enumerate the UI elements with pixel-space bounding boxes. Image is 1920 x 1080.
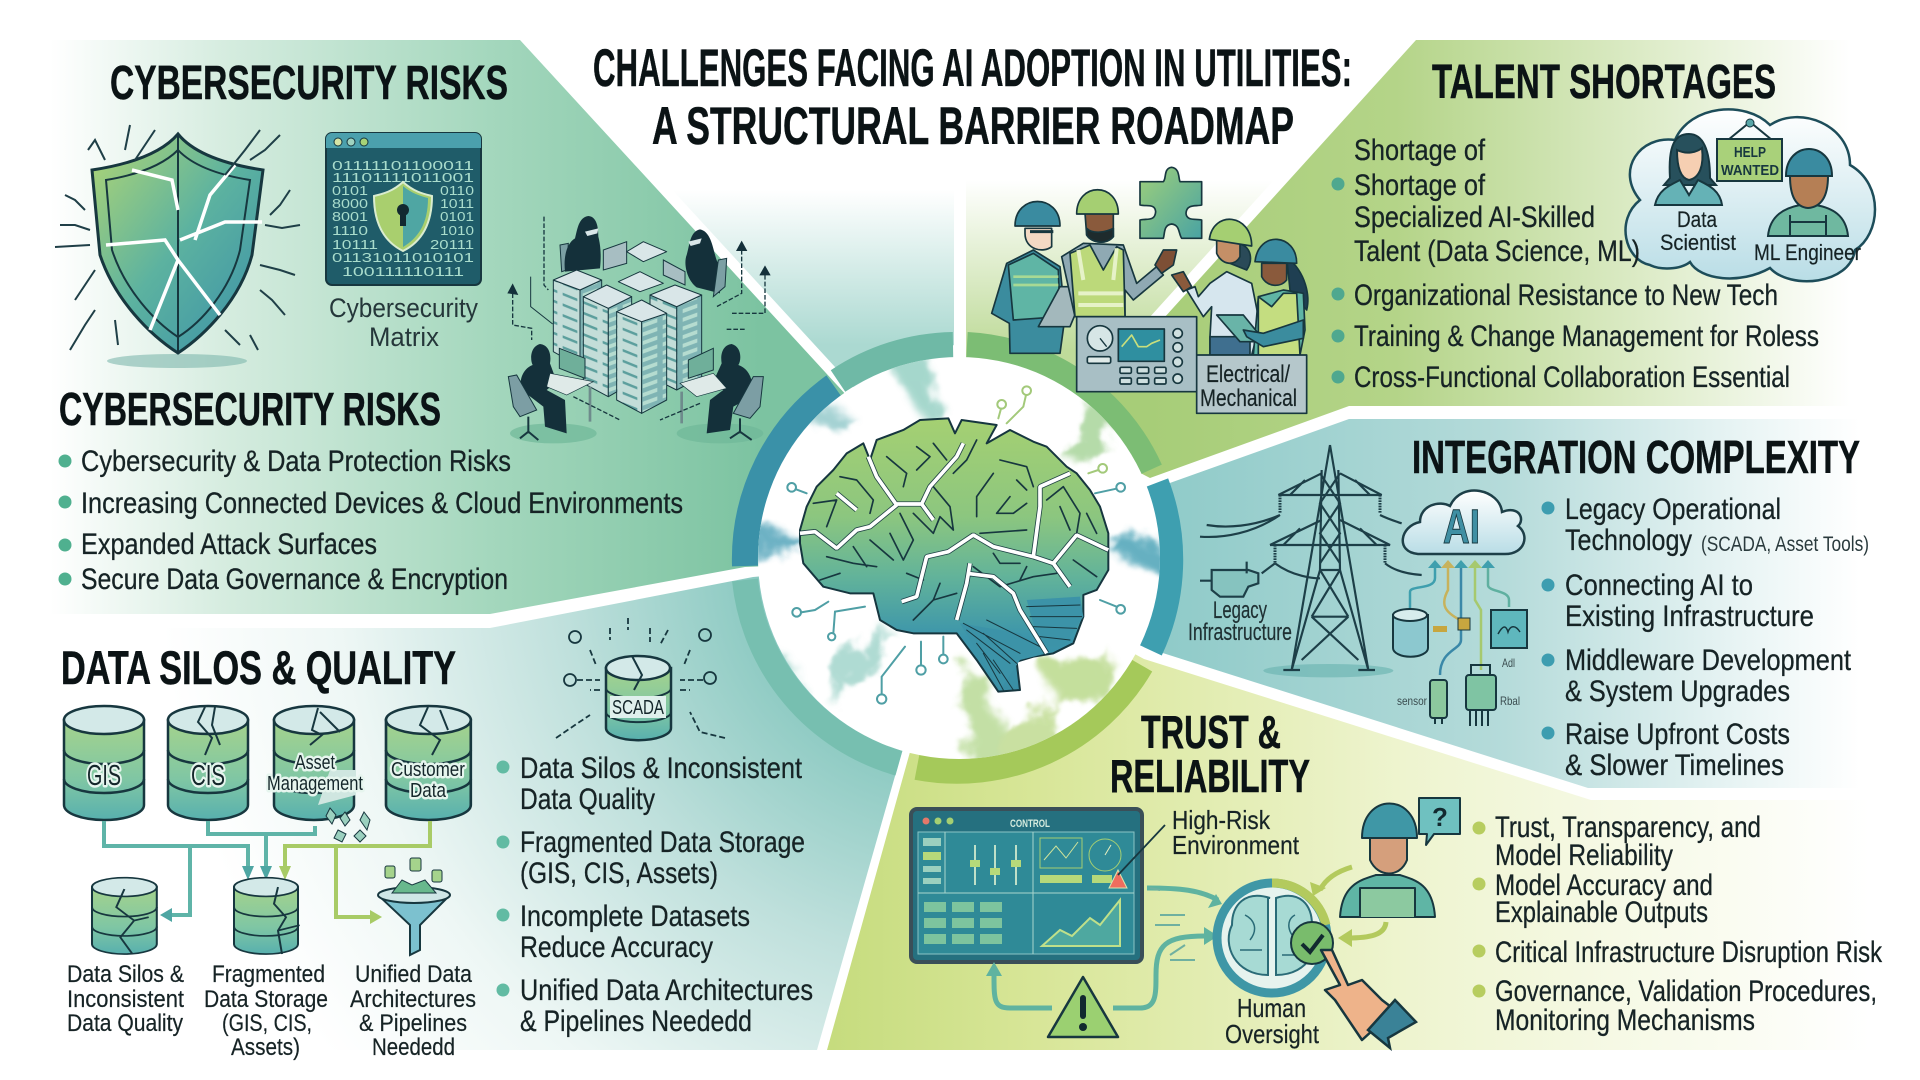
label: high-risk environment [1172,805,1300,860]
bullet list: cybersecurity [58,445,683,596]
icon: cybersecurity matrix window: 100111110111 [342,264,464,279]
icon: GIS database: GIS [87,760,121,792]
icon: CIS database [168,706,248,820]
icon: cybersecurity matrix window: 11101111011001 [332,170,474,185]
labels: lower database captions: Architectures [350,986,476,1013]
label: electrical / mechanical: Electrical/ [1206,361,1290,388]
panel: integration complexity background [958,419,1880,788]
heading: trust and reliability: TRUST & [1141,706,1281,758]
woman worker light shirt [1172,219,1258,355]
labels: lower database captions: Data Storage [204,986,328,1013]
icon: database device [1393,615,1428,657]
icon: help wanted sign [1717,119,1782,181]
labels: lower database captions: Assets) [231,1034,300,1061]
bullet list: trust: Monitoring Mechanisms [1495,1004,1755,1037]
title: CHALLENGES FACING AI ADOPTION IN UTILITIES: [593,39,1352,98]
panel: cybersecurity background [50,40,958,614]
icon: pointing hand [1321,950,1416,1048]
icon: CIS database: CIS [191,760,225,792]
label: human oversight: Human [1237,993,1306,1023]
icon: relay device [1466,675,1496,710]
icon: asset management database [267,706,370,842]
icon: SCADA database: SCADA [612,697,664,719]
bullet list: integration: & Slower Timelines [1565,749,1784,782]
icon: cybersecurity matrix window: 1011 [440,196,474,211]
label: electrical / mechanical: Mechanical [1200,385,1297,412]
icon: AI cloud [1403,491,1524,554]
bullet list: trust [1472,811,1883,1037]
bullet list: trust: Explainable Outputs [1495,896,1708,929]
icon: customer data database: Data [410,780,447,802]
central hub: ring and brain [745,345,1170,771]
panel: trust and reliability [911,706,1883,1049]
label: human oversight: Oversight [1225,1019,1320,1049]
icon: cybersecurity matrix window: 01131011010101 [332,250,474,265]
icon: fractured silos database [92,878,157,954]
labels: role captions: Data [1677,207,1718,232]
bullet list: talent: Organizational Resistance to New Tech [1354,279,1778,312]
icon: cracked brain [787,386,1125,704]
labels: lower database captions: Neededd [372,1034,455,1061]
icon: cybersecurity matrix window: 1110 [332,223,368,238]
icon: cybersecurity matrix window: 10111 [332,237,378,252]
label: legacy infrastructure: Legacy [1213,597,1267,624]
icon: cybersecurity matrix window: 0101 [440,209,474,224]
icon: asset management database: Management [267,773,363,795]
bullet list: talent [1332,134,1819,394]
bullet list: talent: Shortage of [1354,134,1486,167]
heading: data silos and quality: DATA SILOS & QUALITY [61,641,456,694]
bullet list: integration: Legacy Operational [1565,493,1781,526]
icon: fragmented storage database [234,878,300,954]
panel: trust and reliability background [827,558,1880,1050]
brain cracks [800,443,1108,653]
arrows: data flow [104,821,430,924]
heading: cybersecurity risks: CYBERSECURITY RISKS [110,57,508,110]
bullet list: data silos: Data Quality [520,783,655,816]
icon: SCADA database [556,618,725,740]
bullet list: talent: Talent (Data Science, ML) [1354,235,1640,268]
dashed security traces [513,217,765,420]
labels: lower database captions: Fragmented [212,961,325,988]
icon: cybersecurity matrix window: 1010 [440,223,474,238]
bullet list: integration: & System Upgrades [1565,675,1790,708]
arrows: oversight flow [986,867,1386,1008]
title [593,39,1352,156]
heading: cybersecurity risks list: CYBERSECURITY RISKS [59,383,441,435]
icon: sensor device [1430,680,1447,718]
illustration: utility workers team [992,167,1308,413]
labels: lower database captions: (GIS, CIS, [222,1010,312,1037]
labels: lower database captions: Data Quality [67,1010,183,1037]
bullet list: data silos: Incomplete Datasets [520,900,750,933]
diagram: device connections: Rbal [1500,694,1520,708]
bullet list: cybersecurity: Cybersecurity & Data Protection Risks [81,445,511,478]
bullet list: data silos [496,752,813,1038]
woman worker teal hat [1217,239,1308,355]
heading: trust and reliability: RELIABILITY [1110,750,1310,802]
bearded worker [1062,190,1177,317]
icon: transmission tower [1200,445,1422,677]
icon: red warning triangle and pointer [1109,825,1165,888]
labels: role captions: Scientist [1660,230,1736,255]
bullet list: cybersecurity: Expanded Attack Surfaces [81,528,377,561]
panel: cybersecurity wedge background [654,170,954,392]
icon: data scientist [1655,134,1722,205]
labels: lower database captions: Unified Data [355,961,473,988]
bullet list: data silos: Unified Data Architectures [520,974,813,1007]
icon: cybersecurity matrix window: 0110 [440,183,474,198]
panel: talent wedge background [966,170,1283,480]
panel: talent shortages [992,56,1875,413]
labels: role captions: ML Engineer [1754,240,1861,265]
icon: ML engineer [1768,149,1848,236]
label: cybersecurity matrix [329,293,478,352]
diagram: device connections [1393,560,1527,726]
labels: lower database captions: Data Silos & [67,961,184,988]
icon: cybersecurity matrix window [326,133,481,285]
bullet list: integration [1542,493,1869,782]
icon: cybersecurity matrix window: 8000 [332,196,368,211]
hacker top left [560,243,568,272]
bullet list: trust: Model Accuracy and [1495,869,1713,902]
bullet list: integration: Raise Upfront Costs [1565,718,1790,751]
labels: role captions [1660,207,1861,265]
watercolor splashes [758,359,1160,758]
icon: help wanted sign: HELP [1734,144,1766,161]
labels: lower database captions [67,961,476,1061]
bullet list: data silos: Reduce Accuracy [520,931,713,964]
panel: data silos background [50,558,958,1050]
callout: help wanted cloud [1626,109,1875,281]
icon: monitor device [1491,610,1527,648]
circuit nodes [787,386,1125,704]
panel: data silos and quality [61,618,813,1061]
labels: lower database captions: Inconsistent [67,986,184,1013]
bullet list: talent: Specialized AI-Skilled [1354,201,1595,234]
icon: cracked shield [55,125,300,368]
puzzle piece [1140,167,1202,238]
icon: AI cloud: AI [1443,501,1480,554]
bullet list: cybersecurity: Increasing Connected Devices & Cloud Environments [81,487,683,520]
title: A STRUCTURAL BARRIER ROADMAP [652,97,1294,156]
icon: cybersecurity matrix window: 01111101100011 [332,158,474,173]
hacker top right [685,229,720,293]
bullet list: data silos: Fragmented Data Storage [520,826,805,859]
icon: funnel [378,858,450,955]
label: human oversight [1225,993,1320,1049]
panel: cybersecurity risks [55,57,771,596]
bullet list: integration: Existing Infrastructure [1565,600,1814,633]
bullet list: integration: Middleware Development [1565,644,1852,677]
heading: talent shortages: TALENT SHORTAGES [1432,56,1776,109]
panel: integration complexity [1188,431,1869,782]
label: electrical / mechanical [1200,361,1297,412]
bullet list: data silos: Data Silos & Inconsistent [520,752,803,785]
diagram: device connections: Adl [1502,656,1515,670]
icon: worried worker with question: ? [1432,802,1448,832]
icon: asset management database: Asset [295,752,335,774]
bullet list: integration: Connecting AI to [1565,569,1753,602]
icon: cybersecurity matrix window: 8001 [332,209,368,224]
label: cybersecurity matrix: Matrix [369,322,439,352]
bullet list: data silos: & Pipelines Neededd [520,1005,752,1038]
icon: GIS database [64,706,144,820]
hackers bottom [521,344,567,433]
bullet list: cybersecurity: Secure Data Governance & Encryption [81,563,508,596]
labels: lower database captions: & Pipelines [359,1010,467,1037]
worker with clipboard [992,201,1087,353]
ring segments [745,345,1170,771]
icon: control dashboard: CONTROL [1010,818,1050,830]
icon: cybersecurity matrix window: 20111 [430,237,474,252]
label: cybersecurity matrix: Cybersecurity [329,293,478,323]
icon: cybersecurity matrix window: 0101 [332,183,368,198]
icon: customer data database: Customer [391,759,465,781]
diagram: device connections: sensor [1397,694,1427,708]
illustration: hackers around servers [507,216,771,443]
bullet list: trust: Model Reliability [1495,839,1673,872]
icon: help wanted sign: WANTED [1721,162,1779,179]
label: legacy infrastructure [1188,597,1292,646]
heading: trust and reliability [1110,706,1310,802]
icon: control dashboard [911,809,1142,962]
bullet list: integration: Technology [1565,524,1692,557]
icon: warning triangle [1048,977,1118,1037]
icon: worried worker with question [1340,798,1460,917]
icon: customer data database [386,706,471,820]
bullet list: talent: Shortage of [1354,169,1486,202]
bullet list: trust: Trust, Transparency, and [1495,811,1761,844]
panel: talent shortages background [1000,40,1880,478]
bullet list: integration: (SCADA, Asset Tools) [1701,533,1869,556]
server racks [553,242,702,413]
label: high-risk environment: High-Risk [1172,805,1271,835]
bullet list: talent: Training & Change Management for Roless [1354,320,1819,353]
label: high-risk environment: Environment [1172,830,1300,860]
icon: human oversight brain [1217,883,1333,993]
control console [1077,317,1307,413]
label: legacy infrastructure: Infrastructure [1188,619,1292,646]
bullet list: data silos: (GIS, CIS, Assets) [520,857,718,890]
bullet list: talent: Cross-Functional Collaboration Essential [1354,361,1790,394]
